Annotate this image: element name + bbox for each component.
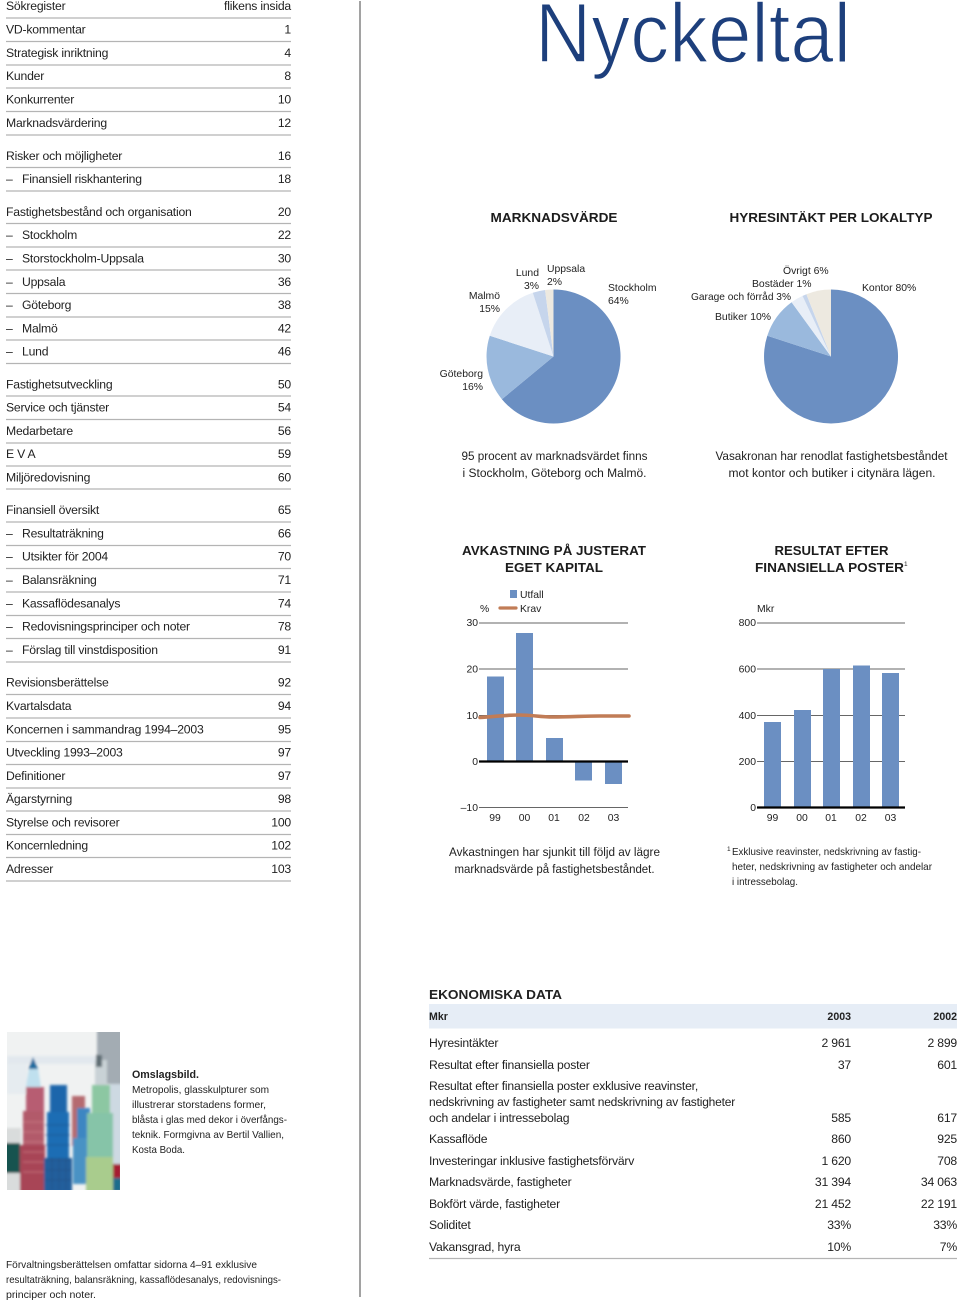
- toc section: financial overview: Kassaflödesanalys: [22, 596, 120, 610]
- table rows: 21 452: [815, 1197, 851, 1211]
- toc section: intro: Kunder: [6, 69, 44, 83]
- toc section: financial overview: 91: [278, 643, 291, 657]
- pie labels: 16%: [462, 382, 483, 393]
- table rows: [429, 1036, 957, 1258]
- heading: AVKASTNING PÅ JUSTERAT: [462, 543, 646, 558]
- toc section: properties: –: [6, 322, 13, 336]
- year labels: 00: [796, 813, 808, 824]
- toc section: financial overview: Redovisningsprinciper och noter: [22, 620, 190, 634]
- toc section: appendices: 102: [271, 838, 291, 852]
- pie chart: [487, 289, 621, 423]
- legend: [480, 590, 544, 615]
- caption: [462, 449, 648, 480]
- heading: [462, 543, 646, 575]
- toc section: appendices: 97: [278, 769, 291, 783]
- year labels: [489, 813, 619, 824]
- table rows: 33%: [933, 1218, 957, 1232]
- pie labels: Garage och förråd 3%: [691, 291, 791, 303]
- toc section: financial overview: Finansiell översikt: [6, 503, 100, 517]
- table header: [429, 1004, 957, 1028]
- table rows: Resultat efter finansiella poster: [429, 1058, 590, 1072]
- pie labels: [440, 264, 657, 393]
- table rows: 33%: [827, 1218, 851, 1232]
- heading: EGET KAPITAL: [505, 560, 603, 575]
- table header: 2003: [827, 1011, 851, 1023]
- caption: Vasakronan har renodlat fastighetsbeståndet: [716, 449, 948, 463]
- toc section: intro: Konkurrenter: [6, 92, 74, 106]
- toc section: risks: 16: [278, 149, 291, 163]
- caption: [449, 845, 660, 876]
- table title: EKONOMISKA DATA: [429, 987, 563, 1002]
- pie labels: Stockholm: [608, 283, 657, 294]
- pie labels: 3%: [524, 281, 539, 292]
- gridlines and axis labels: –10: [461, 803, 478, 814]
- toc section: risks: 18: [278, 172, 291, 186]
- toc section: risks: –: [6, 172, 13, 186]
- toc section: appendices: 103: [271, 862, 291, 876]
- toc section: properties: 20: [278, 205, 291, 219]
- toc section: properties: –: [6, 275, 13, 289]
- toc section: intro: Strategisk inriktning: [6, 46, 108, 60]
- toc section: risks: Risker och möjligheter: [6, 149, 122, 163]
- toc section: properties: 22: [278, 228, 291, 242]
- toc section: intro: 8: [284, 69, 291, 83]
- toc section: appendices: Ägarstyrning: [6, 792, 72, 806]
- bars: [487, 633, 622, 784]
- legend: %: [480, 604, 489, 615]
- pie chart: [764, 289, 898, 423]
- pie labels: Bostäder 1%: [752, 279, 812, 290]
- toc section: financial overview: –: [6, 596, 13, 610]
- cover caption: Omslagsbild.: [132, 1069, 199, 1081]
- footnote: management report: [6, 1260, 281, 1300]
- pie labels: Lund: [516, 268, 539, 279]
- footnote: 1: [727, 846, 731, 853]
- toc section: properties: 46: [278, 344, 291, 358]
- toc section: appendices: 92: [278, 676, 291, 690]
- pie labels: 2%: [547, 277, 562, 288]
- panel: return on equity chart: [449, 543, 660, 876]
- panel: profit after financial items chart: [727, 543, 933, 888]
- pie labels: Uppsala: [547, 264, 585, 275]
- caption: i Stockholm, Göteborg och Malmö.: [462, 466, 646, 480]
- table rows: nedskrivning av fastigheter samt nedskrivning av fastigheter: [429, 1095, 735, 1109]
- year labels: 01: [825, 813, 837, 824]
- year labels: 00: [519, 813, 530, 824]
- toc section: appendices: Revisionsberättelse: [6, 676, 109, 690]
- toc section: financial overview: Utsikter för 2004: [22, 550, 108, 564]
- caption: marknadsvärde på fastighetsbeståndet.: [454, 862, 654, 876]
- cover caption: [132, 1069, 287, 1156]
- footnote: management report: resultaträkning, balansräkning, kassaflödesanalys, redovisnings-: [6, 1275, 281, 1286]
- toc section: properties: Stockholm: [22, 228, 77, 242]
- legend: Krav: [520, 604, 542, 615]
- pie labels: [691, 265, 916, 323]
- toc section: development: Service och tjänster: [6, 400, 109, 414]
- toc section: financial overview: –: [6, 550, 13, 564]
- toc section: properties: –: [6, 252, 13, 266]
- caption: 95 procent av marknadsvärdet finns: [462, 449, 648, 463]
- toc section: financial overview: 78: [278, 620, 291, 634]
- table rows: Hyresintäkter: [429, 1036, 498, 1050]
- toc section: development: [6, 378, 291, 489]
- toc section: development: 59: [278, 447, 291, 461]
- toc section: intro: 1: [284, 22, 291, 36]
- cover caption: illustrerar storstadens former,: [132, 1100, 266, 1111]
- pie labels: 15%: [479, 304, 500, 315]
- legend: Utfall: [520, 590, 544, 601]
- table rows: Kassaflöde: [429, 1132, 488, 1146]
- table rows: Bokfört värde, fastigheter: [429, 1197, 560, 1211]
- table rows: 925: [937, 1132, 957, 1146]
- year labels: 02: [855, 813, 867, 824]
- toc section: financial overview: –: [6, 643, 13, 657]
- unit and gridlines: [739, 604, 905, 814]
- footnote: [727, 846, 933, 888]
- year labels: [767, 813, 896, 824]
- zero axis: [479, 760, 628, 763]
- table rows: Marknadsvärde, fastigheter: [429, 1175, 572, 1189]
- toc section: properties: Storstockholm-Uppsala: [22, 252, 144, 266]
- unit and gridlines: 200: [739, 757, 756, 768]
- toc section: appendices: 97: [278, 746, 291, 760]
- toc section: properties: 42: [278, 322, 291, 336]
- footnote: heter, nedskrivning av fastigheter och andelar: [732, 862, 933, 873]
- toc section: financial overview: –: [6, 526, 13, 540]
- caption: [716, 449, 948, 480]
- cover photo: glass sculptures: [7, 1032, 120, 1190]
- toc section: appendices: Styrelse och revisorer: [6, 816, 120, 830]
- toc section: financial overview: –: [6, 573, 13, 587]
- gridlines and axis labels: 30: [466, 618, 478, 629]
- table rows: 22 191: [921, 1197, 957, 1211]
- year labels: 03: [885, 813, 896, 824]
- toc section: intro: [6, 0, 291, 135]
- toc section: intro: 10: [278, 92, 291, 106]
- heading: 1: [904, 561, 908, 568]
- toc section: appendices: Koncernledning: [6, 838, 88, 852]
- toc section: properties: 36: [278, 275, 291, 289]
- pie labels: Malmö: [469, 291, 500, 302]
- toc section: properties: –: [6, 298, 13, 312]
- toc section: development: 50: [278, 378, 291, 392]
- heading: HYRESINTÄKT PER LOKALTYP: [730, 210, 933, 225]
- footnote: i intressebolag.: [732, 877, 798, 888]
- toc section: properties: Fastighetsbestånd och organisation: [6, 205, 192, 219]
- toc section: financial overview: –: [6, 620, 13, 634]
- unit and gridlines: 600: [739, 664, 756, 676]
- toc section: financial overview: 74: [278, 596, 291, 610]
- pie labels: Kontor 80%: [862, 283, 916, 294]
- table rows: och andelar i intressebolag: [429, 1111, 569, 1125]
- cover caption: blåsta i glas med dekor i överfångs-: [132, 1114, 287, 1126]
- unit and gridlines: Mkr: [757, 604, 775, 615]
- toc section: financial overview: 70: [278, 550, 291, 564]
- toc section: appendices: 95: [278, 722, 291, 736]
- table rows: 34 063: [921, 1175, 957, 1189]
- year labels: 99: [489, 813, 501, 824]
- panel: financial data table: [429, 987, 957, 1258]
- year labels: 99: [767, 813, 778, 824]
- toc section: intro: Marknadsvärdering: [6, 116, 107, 130]
- gridlines and axis labels: 20: [466, 664, 478, 676]
- zero axis: [757, 806, 905, 809]
- toc section: financial overview: 66: [278, 526, 291, 540]
- toc section: appendices: Definitioner: [6, 769, 65, 783]
- toc section: development: Fastighetsutveckling: [6, 378, 112, 392]
- pie labels: Övrigt 6%: [783, 265, 829, 277]
- bars: [764, 666, 899, 807]
- toc section: properties: Malmö: [22, 322, 58, 336]
- year labels: 03: [608, 813, 619, 824]
- toc section: risks: [6, 149, 291, 191]
- toc section: development: Medarbetare: [6, 424, 73, 438]
- table rows: 7%: [940, 1240, 957, 1254]
- toc section: appendices: 94: [278, 699, 291, 713]
- unit and gridlines: 800: [739, 618, 756, 629]
- heading: [755, 543, 908, 575]
- gridlines and axis labels: 10: [466, 711, 478, 722]
- toc section: financial overview: Balansräkning: [22, 573, 97, 587]
- table rows: Vakansgrad, hyra: [429, 1240, 521, 1254]
- toc section: properties: Uppsala: [22, 275, 66, 289]
- table rows: Soliditet: [429, 1218, 471, 1232]
- toc section: development: E V A: [6, 447, 37, 461]
- toc section: intro: 12: [278, 116, 291, 130]
- heading: RESULTAT EFTER: [774, 543, 889, 558]
- unit and gridlines: 0: [750, 803, 756, 814]
- heading: MARKNADSVÄRDE: [490, 210, 618, 225]
- toc section: properties: 30: [278, 252, 291, 266]
- toc section: financial overview: Resultaträkning: [22, 526, 104, 540]
- toc section: intro: VD-kommentar: [6, 22, 86, 36]
- toc section: properties: [6, 205, 291, 364]
- cover caption: Metropolis, glasskulpturer som: [132, 1085, 269, 1096]
- heading: FINANSIELLA POSTER: [755, 560, 905, 575]
- pie labels: Butiker 10%: [715, 312, 771, 323]
- caption: mot kontor och butiker i citynära lägen.: [728, 466, 936, 480]
- toc section: appendices: [6, 676, 291, 881]
- table rows: Resultat efter finansiella poster exklusive reavinster,: [429, 1079, 698, 1093]
- pie labels: Göteborg: [440, 369, 483, 380]
- table rows: 617: [937, 1111, 957, 1125]
- footnote: management report: Förvaltningsberättelsen omfattar sidorna 4–91 exklusive: [6, 1260, 257, 1271]
- gridlines and axis labels: [461, 618, 628, 814]
- toc section: financial overview: [6, 503, 291, 662]
- table header: Mkr: [429, 1011, 448, 1023]
- toc section: properties: Göteborg: [22, 298, 71, 312]
- table rows: 1 620: [822, 1154, 851, 1168]
- table rows: 585: [831, 1111, 851, 1125]
- cover caption: Kosta Boda.: [132, 1145, 185, 1156]
- toc section: appendices: Kvartalsdata: [6, 699, 72, 713]
- toc section: appendices: 100: [271, 816, 291, 830]
- toc section: appendices: 98: [278, 792, 291, 806]
- toc section: appendices: Utveckling 1993–2003: [6, 746, 123, 760]
- toc section: development: Miljöredovisning: [6, 470, 90, 484]
- toc section: appendices: Adresser: [6, 862, 53, 876]
- year labels: 01: [548, 813, 560, 824]
- table rows: 10%: [827, 1240, 851, 1254]
- toc section: properties: 38: [278, 298, 291, 312]
- toc section: properties: –: [6, 228, 13, 242]
- gridlines and axis labels: 0: [472, 757, 478, 768]
- caption: Avkastningen har sjunkit till följd av lägre: [449, 845, 660, 859]
- toc section: development: 60: [278, 470, 291, 484]
- panel: market value pie: [440, 210, 657, 480]
- toc section: risks: Finansiell riskhantering: [22, 172, 142, 186]
- requirement line: [480, 715, 629, 718]
- table rows: Investeringar inklusive fastighetsförvärv: [429, 1154, 635, 1168]
- table rows: 31 394: [815, 1175, 851, 1189]
- toc section: financial overview: 71: [278, 573, 291, 587]
- table rows: 2 961: [822, 1036, 851, 1050]
- table rows: 708: [937, 1154, 957, 1168]
- table rows: 601: [937, 1058, 957, 1072]
- table rows: 2 899: [928, 1036, 957, 1050]
- table rows: 860: [831, 1132, 851, 1146]
- toc section: properties: –: [6, 344, 13, 358]
- table header: 2002: [933, 1011, 957, 1023]
- year labels: 02: [578, 813, 590, 824]
- toc section: appendices: Koncernen i sammandrag 1994–2003: [6, 722, 204, 736]
- panel: table of contents: [6, 0, 291, 881]
- toc section: intro: 4: [284, 46, 291, 60]
- toc section: financial overview: Förslag till vinstdisposition: [22, 643, 158, 657]
- panel: rental income pie: [691, 210, 948, 480]
- pie labels: 64%: [608, 296, 629, 307]
- footnote: Exklusive reavinster, nedskrivning av fastig-: [732, 847, 921, 858]
- unit and gridlines: 400: [739, 711, 756, 722]
- toc section: development: 54: [278, 400, 291, 414]
- cover caption: teknik. Formgivna av Bertil Vallien,: [132, 1130, 284, 1141]
- toc section: development: 56: [278, 424, 291, 438]
- toc section: properties: Lund: [22, 344, 48, 358]
- toc section: financial overview: 65: [278, 503, 291, 517]
- table rows: 37: [838, 1058, 851, 1072]
